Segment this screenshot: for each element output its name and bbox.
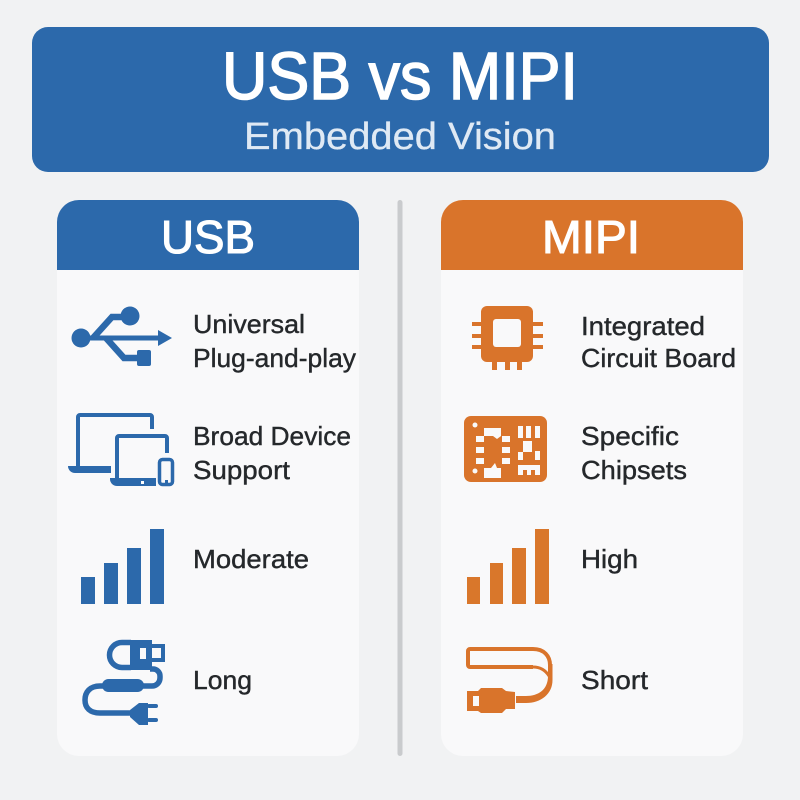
label: Broad Device Support <box>193 421 351 485</box>
USB header <box>57 200 359 270</box>
label: Universal Plug-and-play <box>193 309 356 373</box>
label: Integrated Circuit Board: Circuit Board <box>581 343 736 373</box>
label: High: High <box>581 544 638 574</box>
icon: USB symbol <box>72 306 172 366</box>
icon: long cable <box>85 640 165 725</box>
icon: laptop tablet phone <box>68 415 172 486</box>
label: Specific Chipsets: Chipsets <box>581 455 687 485</box>
MIPI header <box>441 200 743 270</box>
icon: chip <box>472 306 543 370</box>
label: Universal Plug-and-play: Plug-and-play <box>193 343 356 373</box>
label: Specific Chipsets <box>581 421 687 485</box>
MIPI header: MIPI <box>542 211 640 263</box>
label: Integrated Circuit Board <box>581 311 736 373</box>
icon: high signal bars <box>467 529 549 604</box>
panel: MIPI <box>441 200 743 756</box>
icon: circuit board <box>464 416 547 482</box>
label: Integrated Circuit Board: Integrated <box>581 311 705 341</box>
label: Universal Plug-and-play: Universal <box>193 309 305 339</box>
USB header: USB <box>161 211 255 263</box>
label: Moderate: Moderate <box>193 544 309 574</box>
icon: moderate signal bars <box>81 529 164 604</box>
title: USB vs MIPI <box>222 39 578 114</box>
label: Long: Long <box>193 665 252 695</box>
subtitle: Embedded Vision <box>244 116 556 158</box>
icon: short cable <box>467 649 552 713</box>
label: Broad Device Support: Support <box>193 455 291 485</box>
title banner <box>32 27 769 172</box>
label: Short: Short <box>581 665 649 695</box>
label: Broad Device Support: Broad Device <box>193 421 351 451</box>
label: Specific Chipsets: Specific <box>581 421 679 451</box>
panel: USB <box>57 200 359 756</box>
